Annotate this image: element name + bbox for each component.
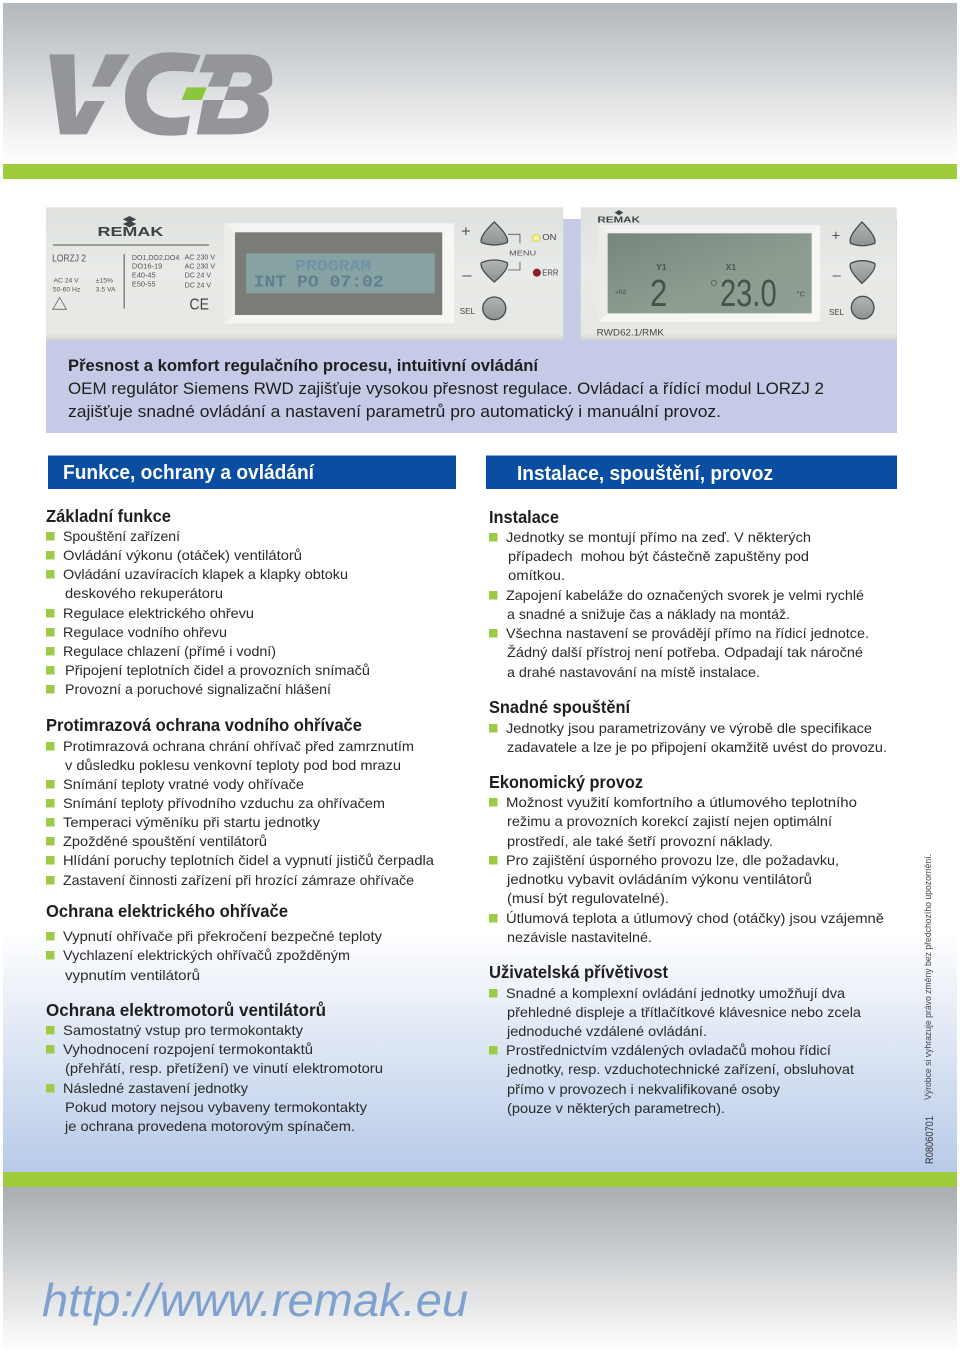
section: Uživatelská přívětivost: (pouze v některých parametrech). (507, 1100, 725, 1116)
photo: LORZJ 2 controller: E40-45 (132, 273, 156, 280)
section: Ochrana elektromotorů ventilátorů: je ochrana provedena motorovým spínačem. (64, 1118, 355, 1134)
section: Základní funkce: Regulace elektrického ohřevu (63, 605, 254, 621)
section: Instalace: Žádný další přístroj není potřeba. Odpadají tak náročné (507, 644, 863, 660)
section: Základní funkce: Regulace vodního ohřevu (63, 624, 227, 640)
photo: LORZJ 2 controller: E50-55 (132, 282, 156, 289)
section: Ochrana elektrického ohřívače: vypnutím ventilátorů (65, 967, 200, 983)
section: Protimrazová ochrana: Protimrazová ochrana chrání ohřívač před zamrznutím (63, 738, 414, 754)
section: Instalace: případech mohou být částečně zapuštěny pod (508, 548, 809, 564)
section: Snadné spouštění: Snadné spouštění (489, 697, 631, 717)
section: Ochrana elektromotorů ventilátorů: Následné zastavení jednotky (63, 1080, 248, 1096)
photo: LORZJ 2 controller: AC 230 V (185, 254, 215, 261)
section: Protimrazová ochrana (46, 715, 434, 888)
photo: LORZJ 2 controller: 50-60 Hz (53, 287, 81, 294)
photo: LORZJ 2 controller: INT PO 07:02 (254, 274, 384, 293)
top green bar (3, 164, 957, 179)
section: Ochrana elektromotorů ventilátorů: Pokud motory nejsou vybaveny termokontakty (65, 1099, 367, 1115)
section: Základní funkce: Připojení teplotních čidel a provozních snímačů (65, 662, 370, 678)
section: Snadné spouštění: zadavatele a lze je po připojení okamžitě uvést do provozu. (507, 739, 887, 755)
section: Protimrazová ochrana: Snímání teploty přívodního vzduchu za ohřívačem (63, 795, 385, 811)
intro text: Přesnost a komfort regulačního procesu, intuitivní ovládání (68, 357, 539, 375)
photo: LORZJ 2 controller: MENU (509, 249, 536, 258)
photo: LORZJ 2 controller: ON (542, 233, 557, 242)
photo: LORZJ 2 controller: SEL (460, 307, 476, 316)
panel: intro (46, 207, 897, 433)
intro text (68, 357, 824, 421)
photo: RWD62.1 controller: X1 (726, 262, 736, 272)
photo: RWD62.1 controller: °C (797, 290, 806, 299)
section: Instalace: Zapojení kabeláže do označených svorek je velmi rychlé (506, 587, 864, 603)
photo: LORZJ 2 controller: LORZJ 2 (52, 253, 86, 264)
section: Instalace: Instalace (489, 507, 559, 527)
section: Ochrana elektromotorů ventilátorů: Ochrana elektromotorů ventilátorů (46, 1000, 326, 1020)
photo: LORZJ 2 controller: ±15% (96, 278, 113, 285)
section: Protimrazová ochrana: Zpožděné spouštění ventilátorů (63, 833, 267, 849)
section: Ekonomický provoz: prostředí, ale také šetří provozní náklady. (507, 833, 773, 849)
section: Snadné spouštění (489, 697, 887, 755)
footer url: http://www.remak.eu (42, 1274, 468, 1326)
photo: RWD62.1 controller: – (833, 268, 842, 284)
heading bar: Funkce, ochrany a ovládání: Funkce, ochrany a ovládání (63, 462, 315, 484)
section: Ekonomický provoz: režimu a provozních korekcí zajistí nejen optimální (507, 813, 832, 829)
photo: LORZJ 2 controller: + (461, 223, 471, 241)
section: Ekonomický provoz: Ekonomický provoz (489, 772, 643, 792)
section: Protimrazová ochrana: v důsledku poklesu venkovní teploty pod bod mrazu (65, 757, 401, 773)
photo: RWD62.1 controller: REMAK (597, 216, 640, 225)
photo: LORZJ 2 controller: REMAK (97, 224, 164, 239)
section: Ochrana elektrického ohřívače: Ochrana elektrického ohřívače (46, 901, 288, 921)
section: Uživatelská přívětivost: jednotky, resp. vzduchotechnické zařízení, obsluhovat (506, 1061, 854, 1077)
section: Základní funkce: Spouštění zařízení (63, 528, 180, 544)
heading bar: Funkce, ochrany a ovládání (48, 456, 456, 489)
section: Ochrana elektromotorů ventilátorů (46, 1000, 383, 1134)
photo: RWD62.1 controller: SEL (829, 308, 845, 317)
section: Základní funkce: Provozní a poruchové signalizační hlášení (65, 681, 331, 697)
section: Základní funkce (46, 506, 370, 697)
section: Ekonomický provoz: nezávisle nastavitelné. (507, 929, 652, 945)
heading bar: Instalace, spouštění, provoz (486, 456, 897, 489)
photo: RWD62.1 controller (581, 207, 897, 340)
photo: RWD62.1 controller: + (832, 229, 840, 245)
photo: LORZJ 2 controller: ERR (542, 268, 559, 277)
section: Ekonomický provoz: Pro zajištění úsporného provozu lze, dle požadavku, (506, 852, 839, 868)
section: Uživatelská přívětivost: Snadné a komplexní ovládání jednotky umožňují dva (506, 985, 845, 1001)
section: Protimrazová ochrana: Temperaci výměníku při startu jednotky (63, 814, 320, 830)
section: Uživatelská přívětivost: přímo v provozech i nekvalifikované osoby (507, 1081, 780, 1097)
section: Uživatelská přívětivost: jednoduché vzdálené ovládání. (506, 1023, 707, 1039)
intro text: zajišťuje snadné ovládání a nastavení parametrů pro automatický i manuální provoz. (68, 403, 721, 421)
section: Uživatelská přívětivost: Prostřednictvím vzdálených ovladačů mohou řídicí (506, 1042, 831, 1058)
section: Ochrana elektromotorů ventilátorů: Samostatný vstup pro termokontakty (63, 1022, 303, 1038)
photo: RWD62.1 controller: 23.0 (720, 272, 777, 315)
section: Instalace: Jednotky se montují přímo na zeď. V některých (506, 529, 811, 545)
section: Ekonomický provoz: Útlumová teplota a útlumový chod (otáčky) jsou vzájemně (506, 910, 884, 926)
section: Uživatelská přívětivost: přehledné displeje a třítlačítkové klávesnice nebo zcela (507, 1004, 861, 1020)
section: Protimrazová ochrana: Zastavení činnosti zařízení při hrozící zámraze ohřívače (63, 872, 414, 888)
vertical note: Výrobce si vyhrazuje právo změny bez předchozího upozornění. (923, 854, 933, 1100)
intro text: OEM regulátor Siemens RWD zajišťuje vysokou přesnost regulace. Ovládací a řídící modul LORZJ 2 (68, 380, 824, 398)
section: Protimrazová ochrana: Snímání teploty vratné vody ohřívače (63, 776, 304, 792)
section: Základní funkce: deskového rekuperátoru (65, 585, 223, 601)
section: Instalace: Všechna nastavení se provádějí přímo na řídicí jednotce. (506, 625, 869, 641)
photo: LORZJ 2 controller: CE (189, 295, 209, 313)
section: Uživatelská přívětivost (489, 962, 861, 1116)
section: Základní funkce: Ovládání uzavíracích klapek a klapky obtoku (63, 566, 348, 582)
section: Základní funkce: Ovládání výkonu (otáček) ventilátorů (63, 547, 302, 563)
section: Základní funkce: Základní funkce (46, 506, 171, 526)
section: Ochrana elektrického ohřívače (46, 901, 382, 983)
section: Ekonomický provoz: jednotku vybavit ovládáním výkonu ventilátorů (506, 871, 812, 887)
photo: LORZJ 2 controller: PROGRAM (295, 258, 371, 276)
photo: LORZJ 2 controller: – (462, 266, 472, 284)
heading bar: Instalace, spouštění, provoz: Instalace, spouštění, provoz (517, 463, 773, 485)
section: Instalace (489, 507, 869, 680)
photo: LORZJ 2 controller (46, 207, 563, 340)
section: Uživatelská přívětivost: Uživatelská přívětivost (489, 962, 668, 982)
photo: LORZJ 2 controller: AC 24 V (54, 278, 79, 285)
photo: LORZJ 2 controller: DC 24 V (185, 273, 211, 280)
photo: RWD62.1 controller: Y1 (656, 262, 667, 272)
section: Ekonomický provoz: (musí být regulovatelné). (507, 890, 669, 906)
photo: LORZJ 2 controller: DC 24 V (185, 282, 211, 289)
section: Protimrazová ochrana: Protimrazová ochrana vodního ohřívače (46, 715, 362, 735)
section: Ochrana elektrického ohřívače: Vychlazení elektrických ohřívačů zpožděným (63, 947, 350, 963)
section: Ekonomický provoz: Možnost využití komfortního a útlumového teplotního (506, 794, 857, 810)
vertical note: R08060701 (924, 1116, 936, 1164)
photo: LORZJ 2 controller: DO16-19 (132, 263, 162, 270)
section: Ochrana elektrického ohřívače: Vypnutí ohřívače při překročení bezpečné teploty (63, 928, 382, 944)
section: Základní funkce: Regulace chlazení (přímé i vodní) (63, 643, 276, 659)
section: Protimrazová ochrana: Hlídání poruchy teplotních čidel a vypnutí jističů čerpadla (63, 852, 434, 868)
photo: LORZJ 2 controller: AC 230 V (185, 263, 215, 270)
photo: LORZJ 2 controller: DO1,DO2,DO4 (132, 255, 179, 262)
photo: LORZJ 2 controller: 3.5 VA (96, 287, 116, 294)
section: Ochrana elektromotorů ventilátorů: Vyhodnocení rozpojení termokontaktů (63, 1041, 313, 1057)
photo: RWD62.1 controller: 2 (650, 272, 667, 315)
section: Instalace: a snadné a snižuje čas a náklady na montáž. (507, 606, 790, 622)
vertical note (923, 854, 936, 1164)
bottom green bar (3, 1172, 957, 1187)
logo: VCB (49, 52, 272, 136)
section: Ekonomický provoz (489, 772, 884, 945)
photo: RWD62.1 controller: »02 (615, 289, 626, 296)
section: Snadné spouštění: Jednotky jsou parametrizovány ve výrobě dle specifikace (506, 720, 872, 736)
section: Instalace: omítkou. (508, 567, 565, 583)
section: Instalace: a drahé nastavování na místě instalace. (507, 664, 760, 680)
photo: RWD62.1 controller: RWD62.1/RMK (597, 328, 664, 338)
section: Ochrana elektromotorů ventilátorů: (přehřátí, resp. přetížení) ve vinutí elektromotoru (65, 1060, 383, 1076)
